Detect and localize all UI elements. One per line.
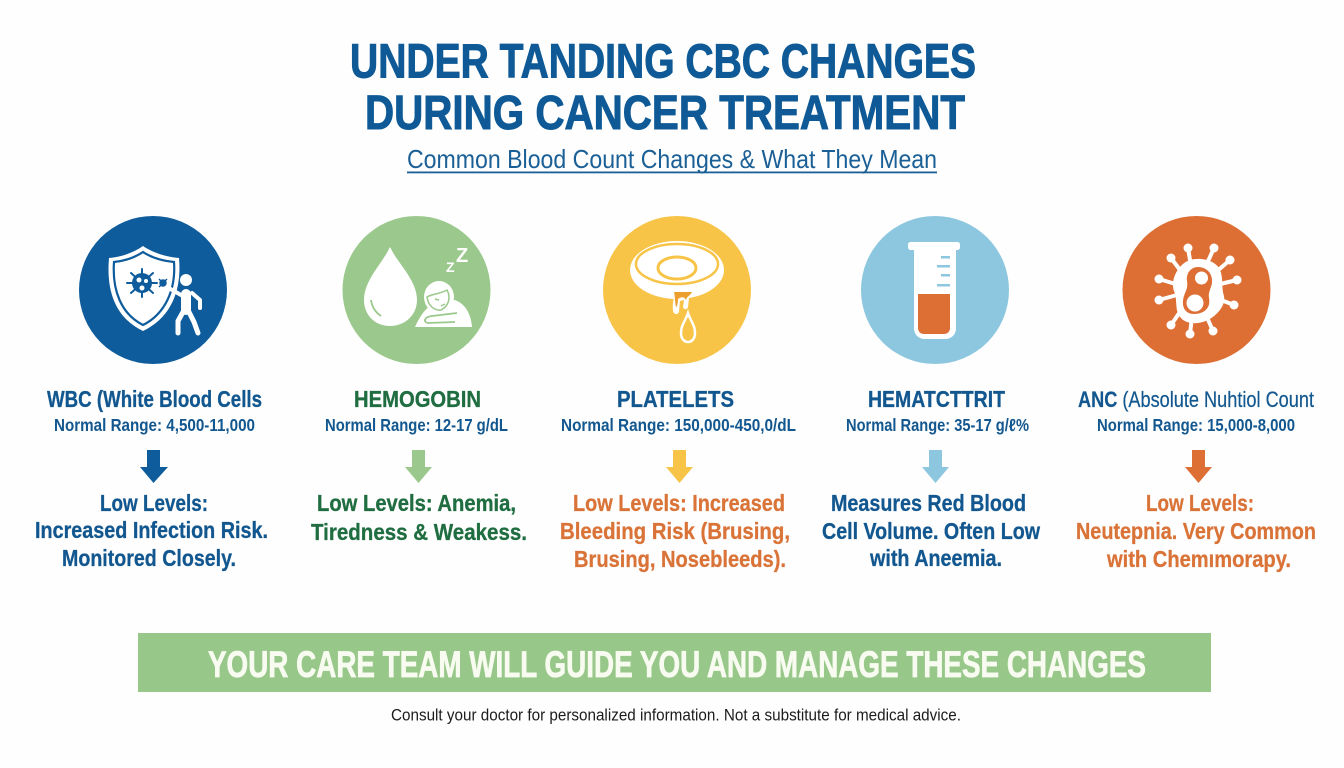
icon: drop and sleeping person: Z bbox=[446, 259, 455, 275]
icon: neutrophil cell bbox=[1122, 216, 1270, 364]
text: Hemoglobin description: Low Levels: Anemia, bbox=[317, 490, 516, 516]
label: Platelets heading: PLATELETS bbox=[617, 386, 734, 412]
text: Hematocrit description bbox=[822, 490, 1041, 571]
text: ANC description: with Chemımorapy. bbox=[1106, 546, 1291, 572]
text: Hematocrit description: Cell Volume. Often Low bbox=[822, 518, 1041, 544]
text: WBC description: Monitored Closely. bbox=[62, 545, 236, 571]
text: WBC description: Increased Infection Risk. bbox=[35, 517, 268, 543]
title bbox=[350, 36, 976, 140]
icon: shield and defender bbox=[79, 216, 227, 364]
label: WBC normal range: Normal Range: 4,500-11,000 bbox=[54, 415, 255, 435]
title: UNDER TANDING CBC CHANGES bbox=[350, 36, 976, 88]
icon: test tube bbox=[861, 216, 1009, 364]
text: ANC description: Low Levels: bbox=[1146, 490, 1254, 516]
icon: platelet disc with drip bbox=[603, 216, 751, 364]
label: Hemoglobin heading: HEMOGOBIN bbox=[354, 386, 481, 412]
panel: Hemoglobin bbox=[311, 216, 527, 545]
text: WBC description: Low Levels: bbox=[100, 490, 208, 516]
arrow: ANC down bbox=[1185, 450, 1212, 483]
panel: Platelets bbox=[560, 216, 796, 572]
text: ANC description bbox=[1076, 490, 1316, 572]
arrow: Platelets down bbox=[666, 450, 693, 483]
text: Platelets description: Bleeding Risk (Brusing, bbox=[560, 518, 790, 544]
label: ANC normal range: Normal Range: 15,000-8,000 bbox=[1097, 415, 1295, 435]
icon: drop and sleeping person bbox=[342, 216, 490, 364]
panel: ANC bbox=[1076, 216, 1316, 572]
subtitle: Common Blood Count Changes & What They Mean bbox=[407, 144, 937, 174]
text: Hematocrit description: Measures Red Blood bbox=[831, 490, 1026, 516]
text: Platelets description: Low Levels: Increased bbox=[573, 490, 785, 516]
text: Hemoglobin description: Tiredness & Weakess. bbox=[311, 519, 527, 545]
panel: Hematocrit bbox=[822, 216, 1041, 571]
text: WBC description bbox=[35, 490, 268, 571]
label: Hemoglobin normal range: Normal Range: 12-17 g/dL bbox=[325, 415, 508, 435]
text: Hematocrit description: with Aneemia. bbox=[869, 545, 1002, 571]
title: DURING CANCER TREATMENT bbox=[365, 87, 965, 140]
arrow: Hemoglobin down bbox=[405, 450, 432, 483]
banner bbox=[138, 633, 1211, 692]
text: Platelets description bbox=[560, 490, 790, 572]
text: Platelets description: Brusing, Nosebleeds). bbox=[574, 546, 786, 572]
arrow: Hematocrit down bbox=[922, 450, 949, 483]
icon: drop and sleeping person: Z bbox=[456, 245, 468, 267]
label: WBC heading: WBC (White Blood Cells bbox=[47, 386, 262, 412]
label: Platelets normal range: Normal Range: 150,000-450,0/dL bbox=[561, 415, 796, 435]
label: Hematocrit normal range: Normal Range: 35-17 g/ℓ% bbox=[846, 415, 1029, 435]
footer disclaimer: Consult your doctor for personalized information. Not a substitute for medical advice. bbox=[391, 706, 961, 724]
label: Hematocrit heading: HEMATCTTRIT bbox=[868, 386, 1005, 412]
panel: WBC bbox=[35, 216, 268, 571]
arrow: WBC down bbox=[140, 450, 168, 483]
text: Hemoglobin description bbox=[311, 490, 527, 545]
